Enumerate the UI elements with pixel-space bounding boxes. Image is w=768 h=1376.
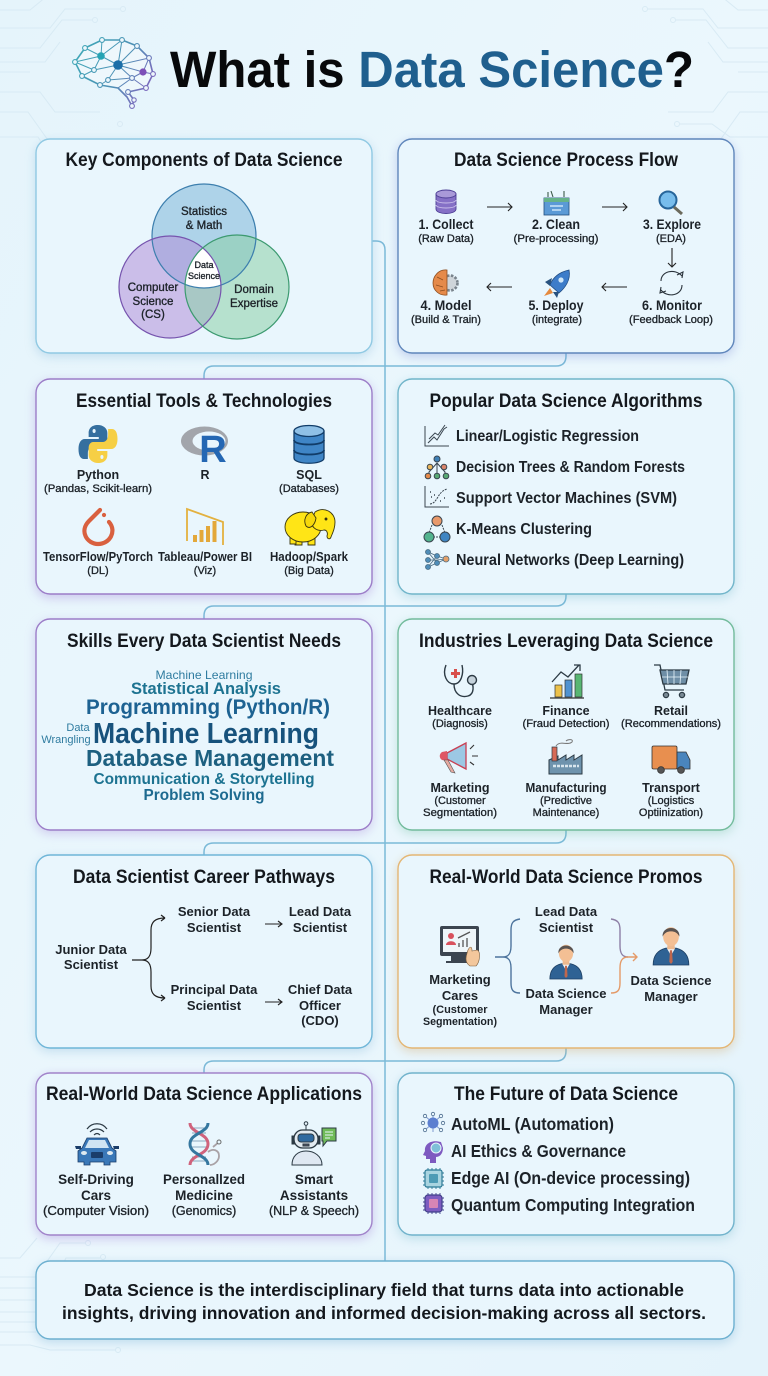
label: data science manager: Manager [644, 989, 698, 1004]
icon: decision tree [425, 456, 449, 479]
title: What is Data Science? [170, 41, 694, 98]
icon: brain gear [433, 270, 458, 295]
panel: career pathways [36, 855, 372, 1048]
step 3 label: 3. Explore [643, 216, 701, 232]
arrow [265, 921, 282, 927]
step 2 label: 2. Clean [532, 216, 580, 232]
summary text: insights, driving innovation and informed decision-making across all sectors. [62, 1303, 706, 1323]
label: retail [621, 704, 721, 730]
icon: magnifier [660, 192, 682, 214]
label: tableau: Tableau/Power BI [158, 550, 252, 564]
step 5 label [528, 297, 584, 326]
heading: tools: Essential Tools & Technologies [76, 391, 332, 412]
step 4 label: (Build & Train) [411, 314, 481, 326]
label: marketing: Marketing [430, 781, 490, 795]
left bracket [495, 919, 520, 993]
heading: applications: Real-World Data Science Applications [46, 1084, 362, 1105]
step 5 label: 5. Deploy [528, 297, 584, 313]
label: transport [639, 781, 703, 819]
label: python: (Pandas, Scikit-learn) [44, 483, 152, 495]
label: marketing [423, 781, 497, 819]
step 4 label: 4. Model [420, 297, 472, 313]
label: retail: Retail [654, 704, 688, 718]
step 2 label [514, 216, 598, 245]
label: marketing: Segmentation) [423, 807, 497, 819]
label: python [44, 468, 152, 495]
label: marketing cares: Segmentation) [423, 1016, 497, 1028]
step 6 label: 6. Monitor [642, 297, 702, 313]
label: smart assistants: (NLP & Speech) [269, 1204, 359, 1218]
icon: neural network [426, 550, 449, 570]
venn diagram: Science [188, 271, 220, 281]
algorithm 1: Linear/Logistic Regression [456, 428, 639, 445]
label: data science manager: Data Science [631, 973, 711, 988]
word cloud: Database Management [86, 745, 334, 771]
step 1 label: 1. Collect [418, 216, 474, 232]
label: marketing cares: (Customer [432, 1004, 488, 1016]
word cloud: Communication & Storytelling [94, 771, 314, 788]
label: manufacturing [526, 781, 606, 819]
icon: megaphone [440, 743, 478, 773]
panel: key components [36, 139, 372, 353]
step 6 label [629, 297, 713, 326]
icon: quantum chip [423, 1193, 444, 1214]
panel: future [398, 1073, 734, 1235]
venn diagram: Computer [128, 282, 178, 294]
item: automl: AutoML (Automation) [451, 1114, 614, 1134]
label: marketing cares: Marketing [429, 972, 491, 987]
panel: promos [398, 855, 734, 1048]
label: healthcare: Healthcare [428, 704, 492, 718]
role: chief [288, 982, 353, 1028]
icon: factory [549, 740, 582, 774]
algorithm 4: K-Means Clustering [456, 521, 592, 538]
arrow [265, 999, 282, 1005]
item: ethics: AI Ethics & Governance [451, 1141, 626, 1161]
right bracket arrow [611, 919, 637, 993]
label: marketing cares [423, 972, 497, 1028]
label: transport: Optiinization) [639, 807, 703, 819]
algorithm 3: Support Vector Machines (SVM) [456, 490, 677, 507]
role: junior: Junior Data [55, 942, 128, 957]
role: junior [55, 942, 128, 972]
icon: clean [544, 191, 569, 215]
step 1 label: (Raw Data) [418, 233, 474, 245]
icon: SVM [425, 486, 449, 507]
label: tensorflow [43, 550, 153, 577]
icon: truck [652, 746, 690, 773]
word cloud: Statistical Analysis [131, 679, 281, 698]
heading: key components: Key Components of Data Science [66, 150, 342, 171]
role: lead: Lead Data [289, 904, 352, 919]
label: finance: (Fraud Detection) [522, 718, 610, 730]
role: junior: Scientist [64, 957, 119, 972]
panel: industries [398, 619, 734, 830]
role: lead: Scientist [293, 920, 348, 935]
brain logo icon [73, 38, 155, 108]
icon: regression [425, 425, 449, 446]
summary text: Data Science is the interdisciplinary field that turns data into actionable [84, 1280, 684, 1300]
venn diagram: Domain [234, 284, 274, 296]
word cloud: Programming (Python/R) [86, 696, 330, 719]
label: tableau: (Viz) [194, 565, 216, 577]
role: chief: (CDO) [301, 1013, 339, 1028]
label: self-driving cars: (Computer Vision) [43, 1204, 149, 1218]
item: edge AI: Edge AI (On-device processing) [451, 1168, 690, 1188]
icon: automl [421, 1112, 445, 1132]
icon: ethics [423, 1141, 443, 1163]
label: tensorflow: TensorFlow/PyTorch [43, 550, 153, 564]
icon: shopping cart [654, 665, 689, 698]
word cloud: Machine Learning [93, 718, 319, 750]
label: retail: (Recommendations) [621, 718, 721, 730]
label: manufacturing: Manufacturing [526, 781, 606, 795]
icon: manager person [550, 945, 582, 979]
label: transport: Transport [642, 781, 701, 795]
venn diagram [119, 184, 289, 339]
label: data science manager [631, 973, 711, 1004]
step 1 label [418, 216, 474, 245]
icon: monitor with hand [440, 926, 480, 966]
heading: promos: Real-World Data Science Promos [430, 867, 702, 888]
label: personalized medicine: (Genomics) [172, 1204, 236, 1218]
icon: finance chart [550, 665, 584, 698]
heading: industries: Industries Leveraging Data Science [419, 631, 713, 652]
label: personalized medicine [163, 1172, 245, 1218]
icon: R: R [199, 429, 227, 471]
summary text [62, 1280, 706, 1323]
label: hadoop: Hadoop/Spark [270, 550, 348, 564]
panel: algorithms [398, 379, 734, 594]
connector lines [204, 241, 566, 1261]
step 4 label [411, 297, 481, 326]
icon: k-means [424, 516, 450, 542]
role: data science manager: Data Science [526, 986, 606, 1001]
label: self-driving cars: Cars [81, 1188, 111, 1203]
icon: edge chip [423, 1168, 444, 1189]
label: smart assistants [269, 1172, 359, 1218]
heading: process flow: Data Science Process Flow [454, 150, 678, 171]
panel: summary footer [36, 1261, 734, 1339]
label: tableau [158, 550, 252, 577]
word cloud: Problem Solving [144, 787, 264, 804]
label: self-driving cars [43, 1172, 149, 1218]
panel: tools [36, 379, 372, 594]
label: personalized medicine: Personallzed [163, 1172, 245, 1187]
heading: skills: Skills Every Data Scientist Needs [67, 631, 341, 652]
role: lead data scientist [535, 904, 598, 935]
role: senior: Scientist [187, 920, 242, 935]
panel: skills [36, 619, 372, 830]
label: SQL: (Databases) [279, 483, 339, 495]
role: principal: Scientist [187, 998, 242, 1013]
label: tensorflow: (DL) [87, 565, 109, 577]
label: smart assistants: Smart [295, 1172, 334, 1187]
heading: career pathways: Data Scientist Career Pathways [73, 867, 335, 888]
bracket arrows [132, 915, 165, 1001]
label: manufacturing: Maintenance) [533, 807, 599, 819]
role: data science manager [526, 986, 606, 1017]
step 2 label: (Pre-processing) [514, 233, 598, 245]
label: transport: (Logistics [648, 795, 695, 807]
label: finance: Finance [542, 704, 590, 718]
venn diagram: & Math [186, 220, 222, 232]
icon: power BI [187, 509, 223, 545]
icon: R [181, 426, 228, 471]
role: data science manager: Manager [539, 1002, 593, 1017]
label: marketing cares: Cares [442, 988, 478, 1003]
label: R: R [200, 468, 210, 482]
arrow: explore to monitor [668, 248, 676, 267]
heading: future: The Future of Data Science [454, 1084, 678, 1105]
icon: large person [653, 927, 689, 965]
label: manufacturing: (Predictive [540, 795, 592, 807]
panel: process flow [398, 139, 734, 353]
algorithm 2: Decision Trees & Random Forests [456, 459, 685, 476]
arrow: clean to explore [602, 203, 627, 211]
algorithm 5: Neural Networks (Deep Learning) [456, 552, 684, 569]
label: hadoop: (Big Data) [284, 565, 334, 577]
word cloud: Data [66, 722, 90, 734]
panel: applications [36, 1073, 372, 1235]
icon: DNA [190, 1123, 221, 1165]
word cloud: Machine Learning [156, 668, 252, 682]
icon: pytorch [84, 510, 112, 544]
step 3 label: (EDA) [656, 233, 686, 245]
label: self-driving cars: Self-Driving [58, 1172, 134, 1187]
icon: hadoop elephant [285, 510, 335, 545]
icon: SQL [294, 426, 324, 463]
icon: car [75, 1124, 119, 1165]
icon: python [78, 425, 118, 463]
role: senior [178, 904, 251, 935]
venn diagram: Statistics [181, 206, 227, 218]
step 6 label: (Feedback Loop) [629, 314, 713, 326]
label: marketing: (Customer [434, 795, 486, 807]
role: senior: Senior Data [178, 904, 251, 919]
icon: monitor cycle [660, 271, 683, 295]
icon: rocket [544, 270, 569, 298]
label: personalized medicine: Medicine [175, 1188, 233, 1203]
icon: stethoscope [445, 665, 476, 696]
venn diagram: Data [194, 260, 214, 270]
venn diagram: (CS) [141, 309, 165, 321]
label: SQL [279, 468, 339, 495]
label: healthcare: (Diagnosis) [432, 718, 488, 730]
label: finance [522, 704, 610, 730]
label: SQL: SQL [296, 468, 322, 482]
role: lead [289, 904, 352, 935]
step 3 label [643, 216, 701, 245]
label: healthcare [428, 704, 492, 730]
step 5 label: (integrate) [532, 314, 582, 326]
word cloud: Wrangling [41, 734, 91, 746]
role: lead data scientist: Lead Data [535, 904, 598, 919]
label: python: Python [77, 468, 119, 482]
item: quantum: Quantum Computing Integration [451, 1195, 695, 1215]
role: principal: Principal Data [171, 982, 258, 997]
venn diagram: Science [133, 296, 173, 308]
icon: robot assistant [292, 1122, 336, 1165]
arrow: collect to clean [487, 203, 512, 211]
arrow: deploy to model [487, 283, 512, 291]
role: chief: Officer [299, 998, 341, 1013]
icon: database [436, 190, 456, 214]
role: principal [171, 982, 258, 1013]
venn diagram: Expertise [230, 298, 278, 310]
role: chief: Chief Data [288, 982, 353, 997]
word cloud [41, 668, 334, 804]
label: hadoop [270, 550, 348, 577]
label: smart assistants: Assistants [280, 1188, 348, 1203]
heading: algorithms: Popular Data Science Algorithms [430, 391, 702, 412]
arrow: monitor to deploy [602, 283, 627, 291]
role: lead data scientist: Scientist [539, 920, 594, 935]
